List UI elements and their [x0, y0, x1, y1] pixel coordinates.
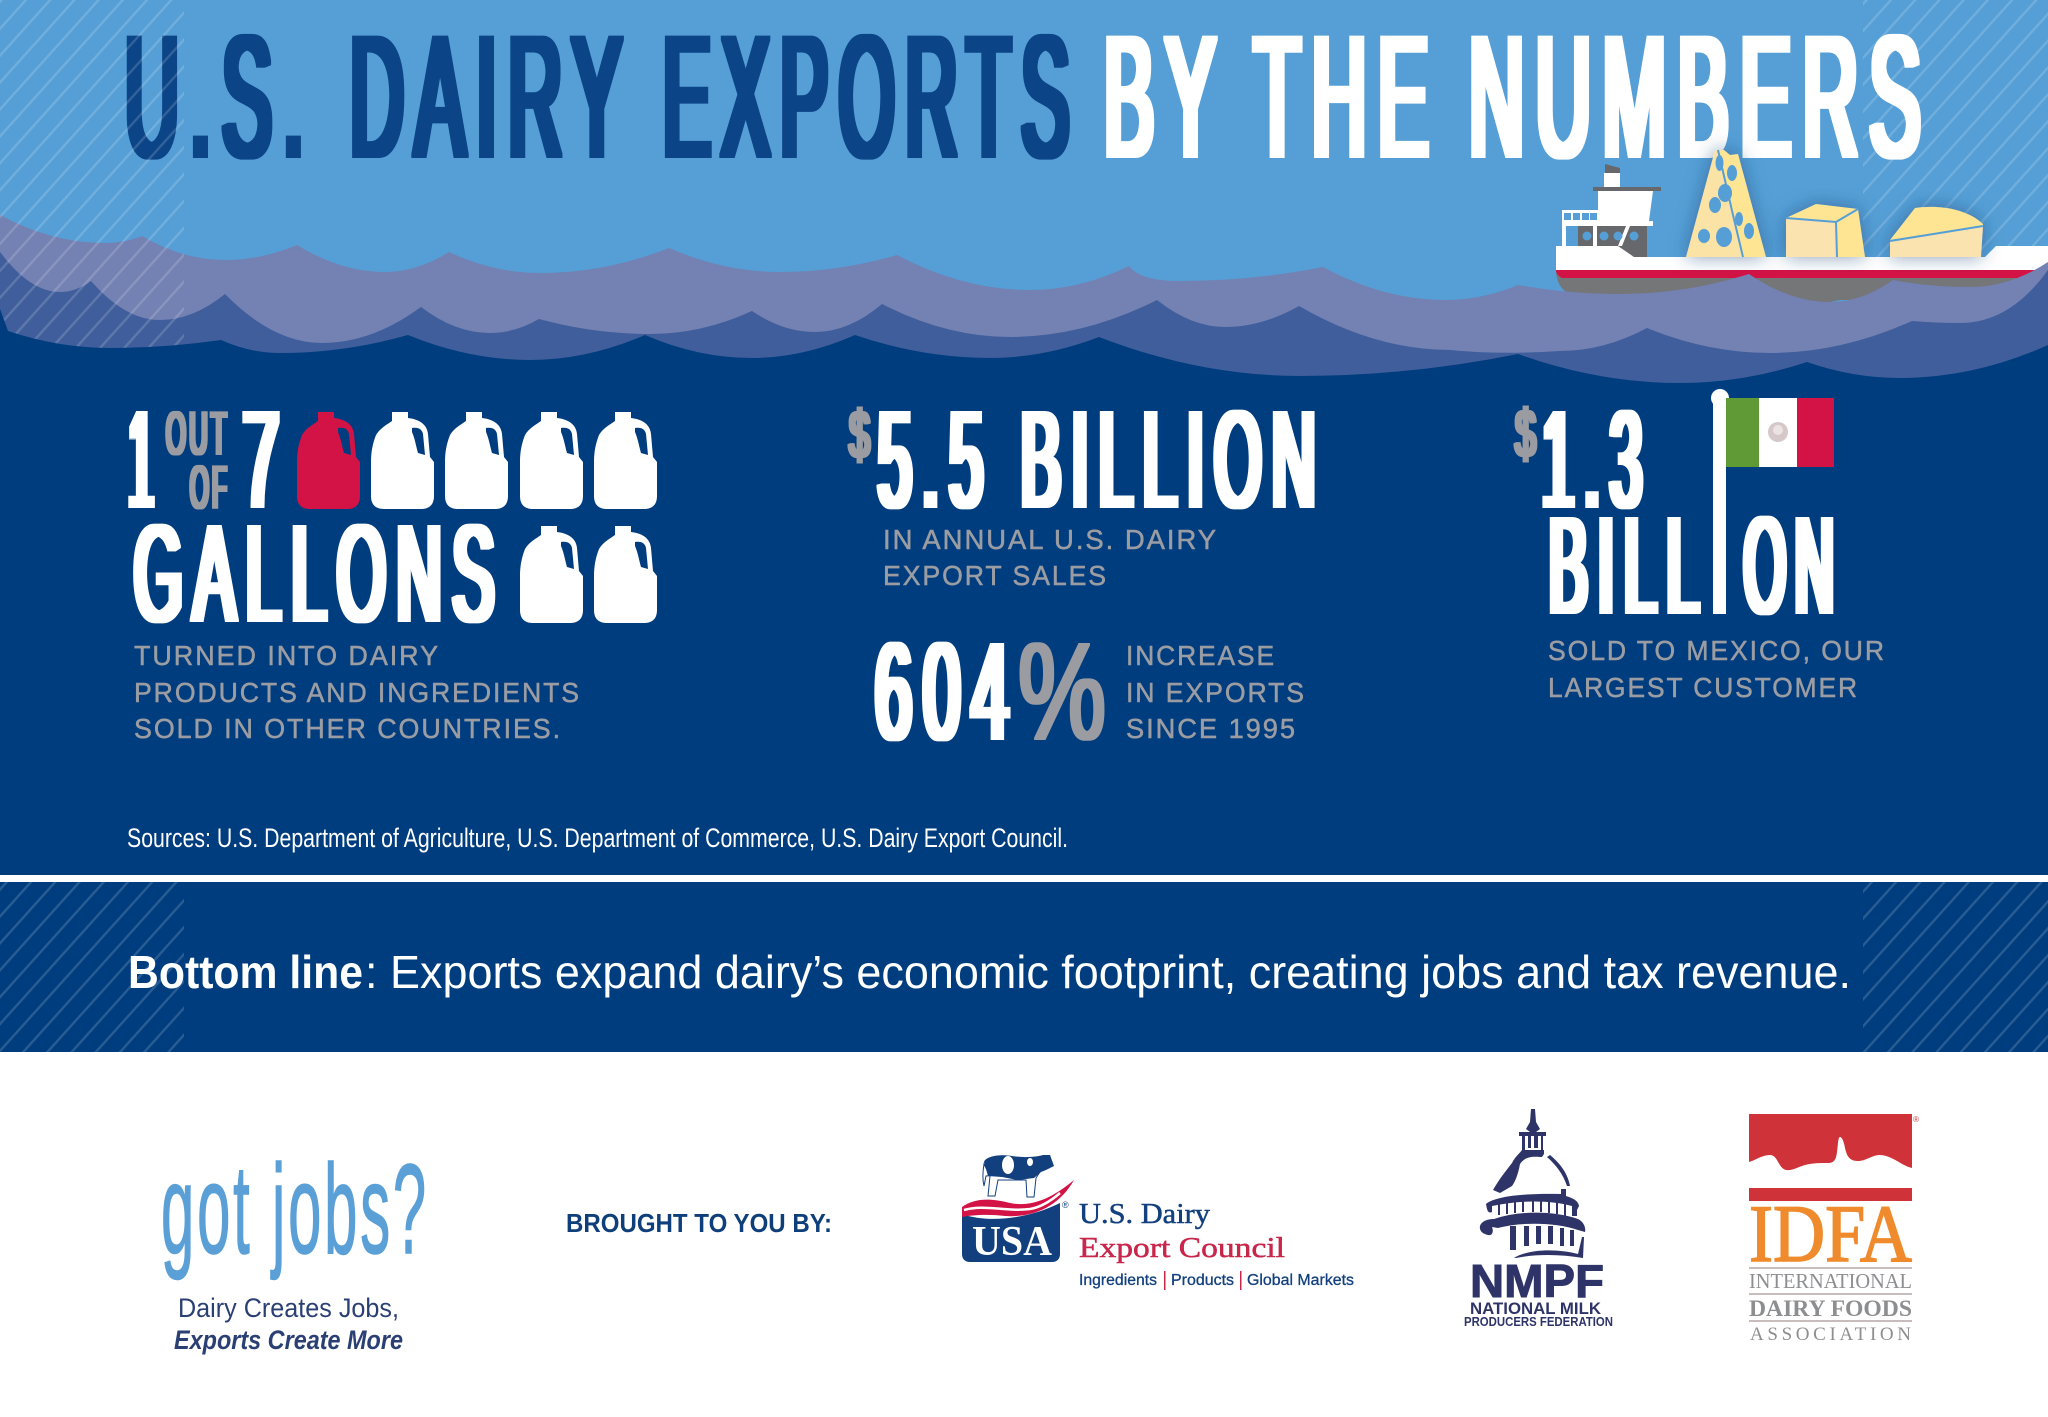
title: EXPORTS: [663, 1, 1080, 193]
title: BY: [1104, 1, 1227, 193]
tall cheese wedge: [1686, 150, 1766, 257]
caption: SOLD TO MEXICO, OUR: [1548, 635, 1886, 666]
USA shield: [962, 1180, 1074, 1265]
USA shield: ®: [1062, 1200, 1069, 1210]
caption: IN ANNUAL U.S. DAIRY: [883, 524, 1218, 555]
stat: 1 out of 7 gallons: GALLONS: [134, 497, 505, 651]
bottom line statement: : Exports expand dairy’s economic footprint, creating jobs and tax revenue.: [365, 946, 1851, 998]
organisation name: Export Council: [1079, 1232, 1285, 1264]
milk drip block: [1749, 1114, 1912, 1170]
cheese block: [1786, 204, 1865, 257]
association name: INTERNATIONAL: [1749, 1269, 1912, 1293]
stat: 1.3 billion to Mexico: 1.3: [1542, 383, 1652, 537]
percent sign: %: [1018, 615, 1106, 769]
icon: capitol dome: [1480, 1109, 1585, 1258]
red bar: [1749, 1188, 1912, 1201]
rules: [1749, 1267, 1912, 1322]
icon: cow: [983, 1155, 1054, 1197]
icon: red milk jug: [297, 412, 360, 509]
band: bottom line: [0, 882, 2048, 1052]
organisation tagline: Products: [1171, 1272, 1234, 1289]
IDFA letters: IDFA: [1749, 1188, 1912, 1279]
tagline: Exports Create More: [174, 1325, 403, 1355]
text: got jobs?: [161, 1138, 429, 1280]
caption: [1548, 635, 1886, 703]
wave: navy front layer and main panel: [0, 309, 2048, 875]
bottom line statement: Bottom line: [128, 946, 363, 998]
text: 5.5 BILLION: [878, 383, 1326, 537]
stat: 1.3 billion to Mexico: [1515, 383, 1886, 703]
logo: U.S. Dairy Export Council: [962, 1155, 1354, 1290]
organisation name: U.S. Dairy: [1079, 1198, 1211, 1230]
NMPF wordmark: NMPF: [1470, 1255, 1604, 1307]
sources line: Sources: U.S. Department of Agriculture, U.S. Department of Commerce, U.S. Dairy Export Council.: [127, 823, 1068, 853]
caption: INCREASE: [1126, 640, 1276, 671]
caption: [883, 524, 1218, 591]
dollar sign: $: [1515, 396, 1536, 472]
stat: 1 out of 7 gallons: 7: [243, 383, 279, 537]
background: sky: [0, 0, 2048, 420]
USA shield: USA: [972, 1219, 1053, 1265]
stat: 1.3 billion to Mexico: ON: [1744, 489, 1843, 643]
stat: 1 out of 7 gallons: 1: [129, 383, 153, 537]
logo: got jobs: [161, 1138, 429, 1355]
caption: SINCE 1995: [1126, 713, 1297, 744]
organisation tagline: Global Markets: [1247, 1272, 1354, 1289]
stat: 1 out of 7 gallons: OUT: [166, 400, 230, 467]
title: [125, 1, 1932, 193]
association name: ASSOCIATION: [1750, 1324, 1911, 1345]
wave: middle layer: [0, 252, 2048, 440]
caption: LARGEST CUSTOMER: [1548, 672, 1859, 703]
wave: light back layer: [0, 215, 2048, 440]
NMPF full name: NATIONAL MILK: [1470, 1299, 1602, 1318]
logo: IDFA: [1749, 1114, 1919, 1345]
stat: 1 out of 7 gallons: [129, 383, 657, 744]
organisation tagline: [1079, 1271, 1354, 1290]
dollar sign: $: [849, 397, 870, 473]
title: U.S.: [125, 1, 315, 193]
hatch: top right: [1863, 0, 2048, 300]
word: billion: BILL: [1549, 489, 1709, 643]
caption: PRODUCTS AND INGREDIENTS: [134, 677, 581, 708]
stat: 1 out of 7 gallons: OF: [190, 454, 230, 521]
title: THE: [1254, 1, 1440, 193]
organisation tagline: Ingredients: [1079, 1272, 1157, 1289]
tagline: Dairy Creates Jobs,: [178, 1293, 399, 1323]
icon: Mexican flag on pole: [1711, 389, 1834, 614]
NMPF full name: PRODUCERS FEDERATION: [1464, 1314, 1613, 1329]
stat: 604 percent: 604: [875, 615, 1020, 769]
icon: cargo ship with cheese: [1556, 150, 2048, 310]
label: out of: [166, 400, 230, 521]
ship hull: [1556, 246, 2048, 310]
caption: IN EXPORTS: [1126, 677, 1306, 708]
stat: 5.5 billion: [849, 383, 1326, 591]
caption: TURNED INTO DAIRY: [134, 640, 440, 671]
caption: EXPORT SALES: [883, 560, 1108, 591]
NMPF full name: [1464, 1299, 1613, 1329]
association name: [1749, 1269, 1912, 1345]
organisation name: [1079, 1198, 1285, 1264]
caption: SOLD IN OTHER COUNTRIES.: [134, 713, 562, 744]
registered mark: ®: [1913, 1115, 1919, 1124]
round cheese slice: [1890, 207, 1983, 257]
brought to you by: BROUGHT TO YOU BY:: [566, 1208, 832, 1238]
title: DAIRY: [350, 1, 633, 193]
caption: [1126, 640, 1306, 744]
tagline: [174, 1293, 403, 1355]
association name: DAIRY FOODS: [1749, 1296, 1912, 1321]
ship cabin: [1562, 164, 1661, 257]
caption: [134, 640, 581, 744]
logo: NMPF: [1464, 1109, 1613, 1329]
hatch: top left: [0, 0, 184, 360]
icons: white milk jugs, row 2: [520, 526, 657, 623]
icons: white milk jugs, row 1: [371, 412, 657, 509]
